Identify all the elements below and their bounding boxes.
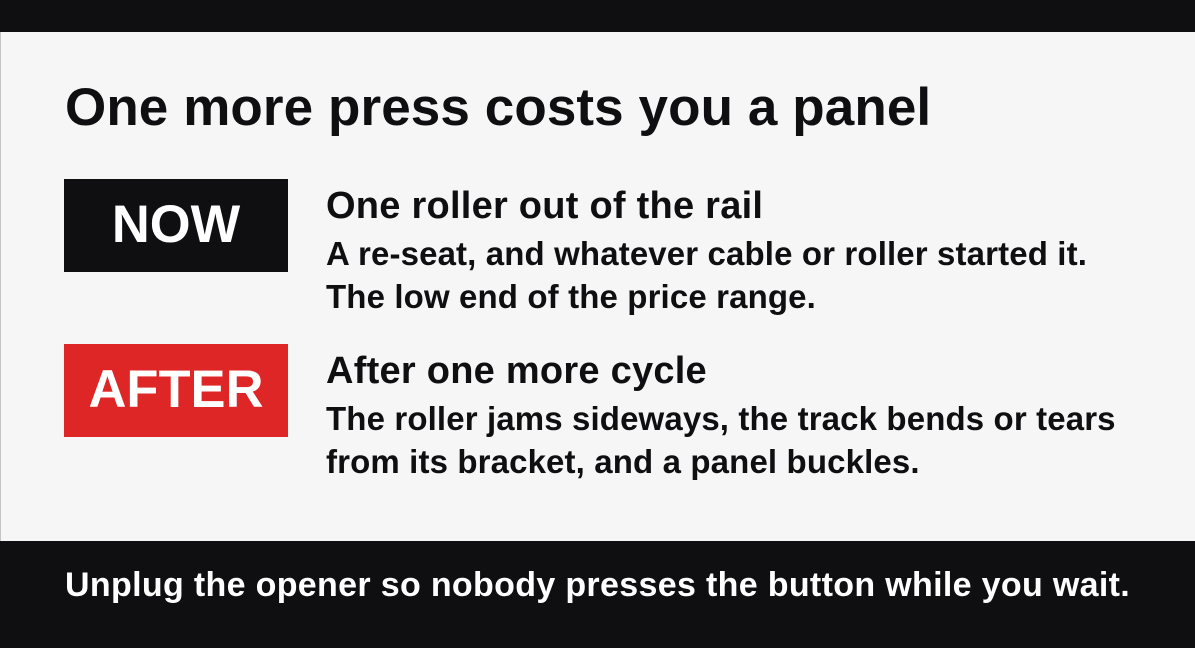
footer bar [0,541,1195,648]
text: after detail: The roller jams sideways, the track bends or tears [326,400,1116,437]
heading: now: One roller out of the rail [326,184,763,226]
badge: AFTER: AFTER [88,360,263,419]
badge: AFTER [64,344,288,437]
footer text: Unplug the opener so nobody presses the button while you wait. [65,566,1130,604]
text: after detail: from its bracket, and a panel buckles. [326,443,920,480]
text: now detail: A re-seat, and whatever cable or roller started it. [326,235,1087,272]
badge: NOW: NOW [112,195,240,254]
heading: after: After one more cycle [326,350,707,392]
text: now detail [326,235,1087,315]
badge: NOW [64,179,288,272]
text: now detail: The low end of the price range. [326,278,816,315]
text: after detail [326,400,1116,480]
title: One more press costs you a panel [65,78,931,137]
panel border [0,32,1,541]
top bar [0,0,1195,32]
